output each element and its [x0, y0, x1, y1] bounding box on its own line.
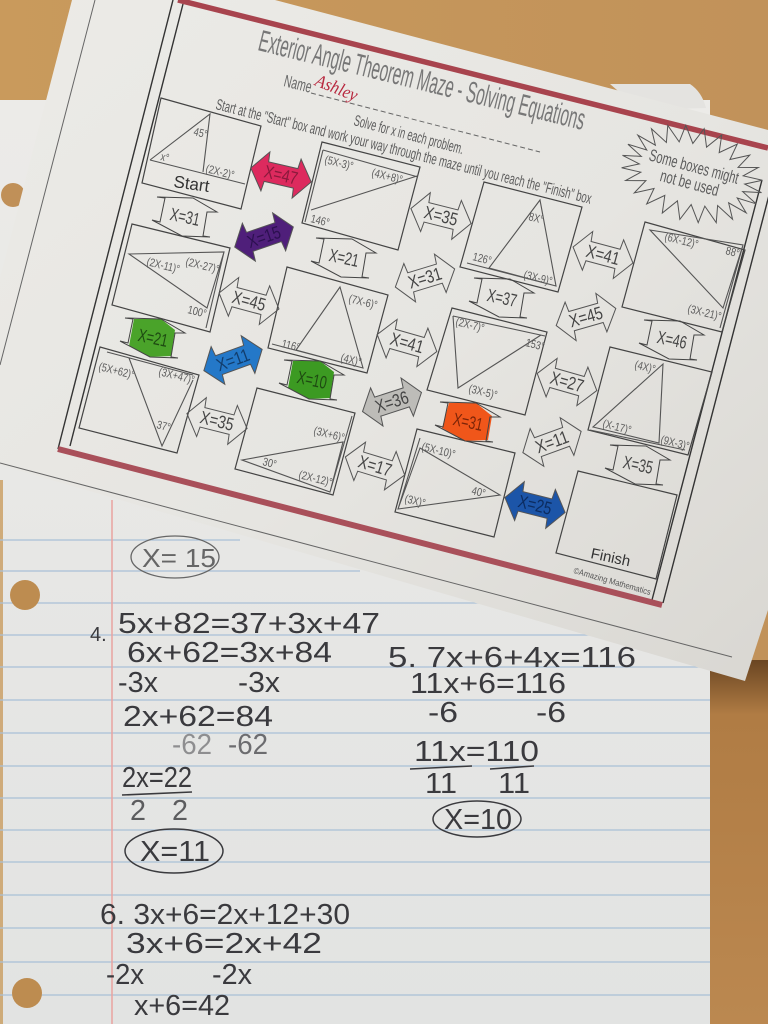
box: 146	[302, 142, 420, 250]
box: 146: 146°	[309, 213, 331, 230]
arrow: X=27: X=27	[548, 368, 586, 396]
handwritten work	[90, 536, 636, 1022]
connector: X=10 green: X=10	[295, 367, 329, 393]
starburst callout: not be used	[658, 166, 721, 200]
connector: X=21 green: X=21	[136, 325, 170, 351]
box: 116	[268, 267, 388, 373]
arrow: X=31	[390, 250, 460, 306]
arrow: X=11	[516, 413, 588, 471]
box: start: (2X-2)°	[204, 163, 235, 182]
connector: X=35: X=35	[621, 452, 655, 478]
box: 37: (3X+47)°	[157, 366, 196, 387]
box: 40: (5X-10)°	[420, 441, 456, 462]
box: finish	[556, 471, 677, 579]
arrow: X=35 lower left	[182, 394, 252, 448]
notebook hole middle	[10, 580, 40, 610]
problem 6 solution: 3x+6=2x+42	[126, 928, 322, 960]
notebook hole bottom	[12, 978, 42, 1008]
problem 5 solution: 5. 7x+6+4x=116	[388, 642, 636, 674]
problem 4 solution: 2	[130, 795, 146, 827]
answer x=15	[131, 536, 219, 578]
starburst callout	[610, 110, 768, 238]
arrow: X=17	[340, 438, 410, 494]
connector: X=31: X=31	[168, 204, 202, 230]
box: 116: (4X)°	[339, 352, 363, 369]
arrow: X=35 lower left: X=35	[198, 407, 236, 435]
box: 4X: (9X-3)°	[659, 434, 690, 453]
box: 88	[622, 222, 745, 332]
arrow: X=41 middle: X=41	[388, 329, 426, 357]
box: 146: (4X+8)°	[370, 167, 404, 187]
box: 126: 8X°	[527, 211, 545, 227]
arrow: X=11 blue: X=11	[214, 345, 252, 375]
connector: X=46	[639, 320, 704, 360]
box: 37	[79, 347, 199, 453]
box: 100	[112, 224, 230, 332]
arrow: X=15 purple: X=15	[245, 222, 283, 252]
box: 30: (2X-12)°	[297, 469, 333, 490]
problem 4 solution: 2x+62=84	[123, 701, 273, 733]
box: 100: 100°	[186, 304, 208, 321]
arrow: X=17: X=17	[356, 451, 394, 481]
arrow: X=27	[532, 354, 602, 410]
problem 5 solution: -6	[428, 697, 458, 729]
bottom red border	[58, 449, 662, 605]
problem 5 solution: 11	[498, 768, 530, 800]
name line: Ashley	[312, 70, 361, 105]
arrow: X=35: X=35	[422, 202, 460, 230]
arrow: X=47 pink	[246, 149, 316, 201]
paper sheet	[0, 0, 768, 681]
box: 4X: (X-17)°	[601, 418, 632, 437]
problem 4 solution: 2x=22	[122, 762, 192, 794]
box: start	[142, 98, 261, 209]
problem 5 solution: 11x=110	[414, 736, 539, 768]
answer x=15: X= 15	[142, 543, 216, 573]
arrow: X=41: X=41	[584, 241, 622, 269]
arrow: X=36 grey: X=36	[373, 387, 411, 417]
notebook hole top	[1, 183, 25, 207]
arrow: X=11 blue	[197, 331, 269, 389]
connector: X=21 green	[120, 318, 185, 358]
connector: X=35	[605, 445, 670, 485]
problem 4 solution: -62	[228, 729, 268, 761]
connector: X=31 orange	[435, 402, 500, 442]
box: 30: 30°	[261, 456, 278, 472]
connector: X=37: X=37	[485, 285, 519, 311]
arrow: X=15 purple	[228, 208, 300, 266]
box: 100: (2X-11)°	[145, 256, 181, 276]
arrow: X=45 right: X=45	[567, 303, 605, 331]
arrow: X=36 grey	[356, 373, 428, 431]
box: 100: (2X-27)°	[184, 256, 220, 277]
arrow: X=45 left: X=45	[230, 287, 268, 315]
problem 5 solution: X=10	[444, 804, 512, 836]
arrow: X=47 pink: X=47	[262, 161, 300, 189]
problem 4 solution: 2	[172, 795, 188, 827]
instruction 1: Solve for x in each problem.	[352, 112, 466, 158]
copyright: ©Amazing Mathematics	[572, 565, 652, 597]
problem 4 solution: 5x+82=37+3x+47	[118, 608, 380, 640]
arrow: X=31: X=31	[406, 263, 444, 293]
box: 40: (3X)°	[403, 493, 427, 510]
arrow: X=45 right	[551, 289, 621, 345]
top red border	[178, 0, 768, 148]
box: start: Start	[172, 172, 211, 196]
box: 153: 153°	[524, 337, 546, 354]
connector: X=37	[469, 278, 534, 318]
box: 37: (5X+62)°	[97, 361, 136, 382]
box: 153: (3X-5)°	[467, 383, 498, 402]
problem 4 solution: -3x	[118, 667, 158, 699]
box: 116: (7X-6)°	[347, 293, 378, 312]
frame	[58, 0, 768, 603]
box: 40: 40°	[470, 485, 487, 501]
arrow: X=41 middle	[372, 315, 442, 371]
connector: X=21	[311, 238, 376, 278]
connector: X=10 green	[279, 360, 344, 400]
box: 30	[235, 388, 355, 495]
connector: X=31	[152, 197, 217, 237]
connector: X=21: X=21	[327, 245, 361, 271]
box: 30: (3X+6)°	[312, 425, 346, 445]
box: finish: Finish	[589, 545, 632, 570]
problem 6 solution: -2x	[106, 959, 144, 991]
box: 126: 126°	[471, 251, 493, 268]
arrow: X=45 left	[214, 274, 284, 328]
box: 37: 37°	[155, 419, 172, 435]
box: 88: (6X-12)°	[663, 231, 699, 252]
arrow: X=41	[568, 228, 638, 282]
problem 6 solution: -2x	[212, 959, 252, 991]
problem 5 solution: 11	[425, 768, 457, 800]
arrow: X=11: X=11	[533, 427, 571, 457]
arrow: X=25 dark blue: X=25	[516, 491, 554, 519]
problem 6 solution: x+6=42	[134, 990, 230, 1022]
name line	[282, 70, 540, 152]
box: 126	[460, 182, 582, 292]
problem 5 solution: 11x+6=116	[410, 668, 566, 700]
problem 4 solution: -3x	[238, 667, 281, 699]
box: 146: (5X-3)°	[323, 154, 354, 173]
name line: Name	[282, 71, 314, 97]
box: start: x°	[159, 151, 170, 165]
problem 4 solution: 6x+62=3x+84	[127, 637, 332, 669]
box: 40	[395, 429, 515, 537]
connector: X=46: X=46	[655, 327, 689, 353]
box: start: 45°	[192, 126, 209, 142]
box: 116: 116°	[280, 338, 301, 355]
box: 126: (3X-9)°	[522, 269, 553, 288]
back sheet tab	[610, 84, 706, 110]
box: 153: (2X-7)°	[454, 316, 485, 335]
box: 4X	[588, 347, 712, 455]
arrow: X=25 dark blue	[500, 478, 570, 532]
problem 6 solution	[100, 899, 350, 1022]
worksheet	[0, 0, 768, 681]
connector: X=31 orange: X=31	[451, 409, 485, 435]
problem 4 solution	[90, 608, 380, 873]
box: 153	[427, 308, 547, 415]
box: 4X: (4X)°	[633, 359, 657, 376]
box: 88: (3X-21)°	[686, 303, 722, 324]
problem 4 solution: -62	[172, 729, 212, 761]
problem 4 solution: X=11	[140, 836, 210, 868]
wood strip lower right	[708, 660, 768, 1024]
box: 88: 88°	[724, 245, 741, 261]
problem 6 solution: 6. 3x+6=2x+12+30	[100, 899, 350, 931]
problem 4 solution: 4.	[90, 624, 107, 646]
arrow: X=35	[406, 189, 476, 243]
problem 5 solution	[388, 642, 636, 837]
problem 5 solution: -6	[536, 697, 566, 729]
